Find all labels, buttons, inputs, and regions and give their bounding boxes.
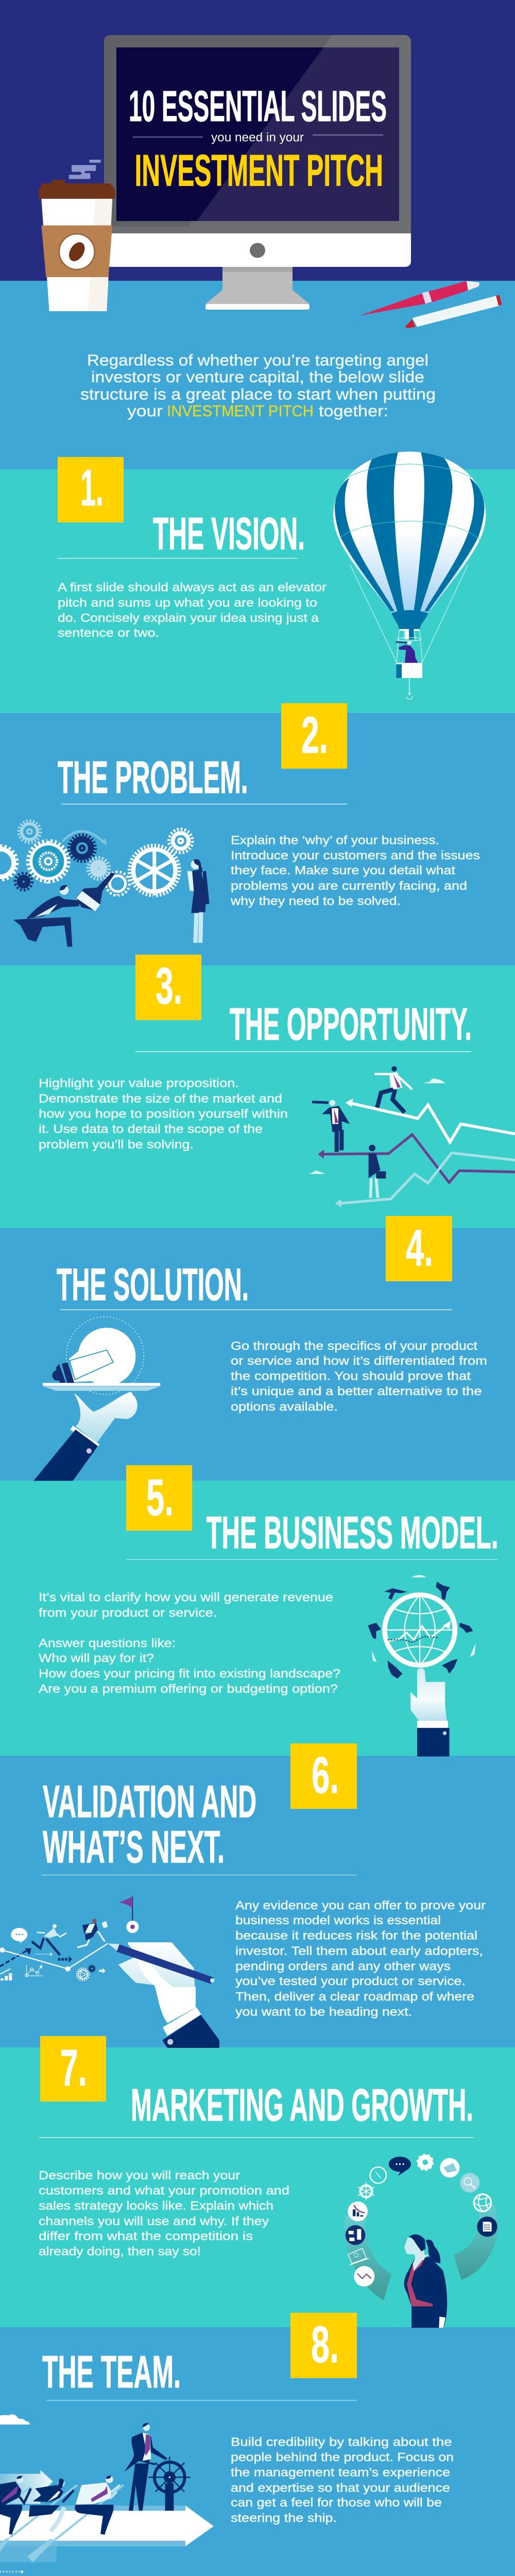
title: you need in your xyxy=(211,131,304,144)
panel: 3 the opportunity xyxy=(39,955,515,1208)
body text: Are you a premium offering or budgeting option? xyxy=(39,1682,338,1696)
body text xyxy=(231,1339,487,1413)
heading xyxy=(43,1776,256,1872)
number badge 2 xyxy=(281,703,347,769)
illustration: gears and oil can xyxy=(0,821,208,947)
body text: options available. xyxy=(231,1400,338,1413)
body text: Describe how you will reach your xyxy=(39,2168,240,2182)
intro text: Regardless of whether you’re targeting angel xyxy=(87,351,428,369)
body text: Build credibility by talking about the xyxy=(231,2435,452,2448)
body text xyxy=(58,580,327,639)
body text: problem you’ll be solving. xyxy=(39,1138,194,1151)
body text: investor. Tell them about early adopters, xyxy=(235,1944,483,1958)
number badge 8: 8. xyxy=(311,2316,339,2374)
intro text xyxy=(80,351,436,420)
heading: WHAT’S NEXT. xyxy=(43,1821,225,1872)
panel: 5 the business model xyxy=(39,1465,499,1756)
body text: you’ve tested your product or service. xyxy=(235,1974,466,1988)
heading: THE TEAM. xyxy=(42,2346,181,2397)
body text: the competition. You should prove that xyxy=(231,1369,471,1383)
body text xyxy=(39,2168,289,2258)
number badge 8 xyxy=(290,2313,357,2378)
intro text: INVESTMENT PITCH xyxy=(167,402,314,420)
body text: people behind the product. Focus on xyxy=(231,2450,454,2464)
body text xyxy=(39,1590,340,1696)
number badge 3: 3. xyxy=(156,957,182,1015)
body text: differ from what the competition is xyxy=(39,2229,253,2243)
panel: 8 the team xyxy=(0,2313,454,2574)
number badge 4: 4. xyxy=(406,1219,433,1277)
body text: do. Concisely explain your idea using just a xyxy=(58,611,319,624)
number badge 7: 7. xyxy=(60,2039,87,2097)
body text: why they need to be solved. xyxy=(230,894,401,908)
body text: Demonstrate the size of the market and xyxy=(39,1092,282,1105)
intro text: your xyxy=(127,402,163,420)
illustration: woman and marketing icons xyxy=(345,2155,498,2328)
body text: sentence or two. xyxy=(58,626,159,639)
body text: pending orders and any other ways xyxy=(235,1959,451,1973)
body text xyxy=(230,834,480,908)
intro text: investors or venture capital, the below slide xyxy=(91,368,424,386)
body text: because it reduces risk for the potential xyxy=(235,1929,477,1942)
body text: Any evidence you can offer to prove your xyxy=(235,1899,486,1912)
body text: Highlight your value proposition. xyxy=(39,1076,239,1090)
heading: THE VISION. xyxy=(153,508,305,559)
body text: How does your pricing fit into existing landscape? xyxy=(39,1667,340,1680)
panel: header xyxy=(39,35,502,420)
body text: Who will pay for it? xyxy=(39,1651,154,1665)
illustration: rowing team on arrow xyxy=(0,2414,214,2574)
number badge 6 xyxy=(290,1743,357,1809)
illustration: hot air balloon xyxy=(333,451,486,699)
panel: 2 the problem xyxy=(0,703,480,947)
body text: can get a feel for those who will be xyxy=(231,2496,442,2509)
body text: they face. Make sure you detail what xyxy=(231,863,456,877)
body text: It’s vital to clarify how you will generate revenue xyxy=(39,1590,333,1604)
body text: sales strategy looks like. Explain which xyxy=(39,2199,273,2212)
heading: THE PROBLEM. xyxy=(58,752,248,803)
body text: Introduce your customers and the issues xyxy=(231,849,480,862)
illustration: light bulb on tray xyxy=(33,1317,160,1481)
panel: 6 validation and what's next xyxy=(0,1743,486,2048)
body text xyxy=(235,1899,486,2019)
intro text: structure is a great place to start when putting xyxy=(80,385,436,403)
number badge 2: 2. xyxy=(301,706,328,764)
number badge 1 xyxy=(58,457,124,522)
body text: it’s unique and a better alternative to the xyxy=(231,1384,482,1398)
body text: steering the ship. xyxy=(231,2511,337,2524)
body text: the management team’s experience xyxy=(231,2466,450,2479)
body text: Then, deliver a clear roadmap of where xyxy=(235,1990,474,2003)
body text: and expertise so that your audience xyxy=(231,2481,450,2495)
body text: pitch and sums up what you are looking to xyxy=(58,596,317,609)
body text xyxy=(231,2435,454,2524)
number badge 5: 5. xyxy=(146,1469,174,1527)
panel: 4 the solution xyxy=(33,1216,487,1481)
body text: how you hope to position yourself within xyxy=(39,1107,288,1120)
panel: 7 marketing and growth xyxy=(39,2036,498,2328)
illustration: globe on finger xyxy=(368,1575,476,1756)
number badge 4 xyxy=(386,1216,452,1281)
body text: A first slide should always act as an elevator xyxy=(58,580,327,594)
panel: 1 the vision xyxy=(58,451,486,699)
body text: or service and how it’s differentiated from xyxy=(231,1354,487,1367)
body text: Answer questions like: xyxy=(39,1636,176,1650)
number badge 5 xyxy=(126,1465,192,1531)
body text xyxy=(39,1076,288,1151)
icon: desktop monitor xyxy=(104,35,411,310)
body text: Go through the specifics of your product xyxy=(231,1339,478,1352)
heading: THE SOLUTION. xyxy=(57,1259,249,1310)
icon: pens xyxy=(359,281,502,328)
body text: business model works is essential xyxy=(235,1913,441,1927)
number badge 1: 1. xyxy=(80,459,104,517)
icon: coffee cup xyxy=(39,160,115,311)
number badge 3 xyxy=(135,955,201,1020)
body text: problems you are currently facing, and xyxy=(231,879,467,892)
body text: you want to be heading next. xyxy=(235,2005,412,2019)
body text: already doing, then say so! xyxy=(39,2244,201,2258)
body text: customers and what your promotion and xyxy=(39,2183,289,2197)
body text: channels you will use and why. If they xyxy=(39,2214,269,2228)
illustration: hand drawing growth line xyxy=(0,1896,219,2048)
body text: from your product or service. xyxy=(39,1606,217,1619)
body text: it. Use data to detail the scope of the xyxy=(39,1122,263,1136)
title xyxy=(129,82,387,196)
intro text: together: xyxy=(319,402,388,420)
body text: Explain the ‘why’ of your business. xyxy=(231,834,439,847)
heading: VALIDATION AND xyxy=(43,1776,256,1827)
number badge 6: 6. xyxy=(312,1747,339,1804)
illustration: climbers on arrows xyxy=(309,1066,515,1208)
number badge 7 xyxy=(40,2036,106,2102)
